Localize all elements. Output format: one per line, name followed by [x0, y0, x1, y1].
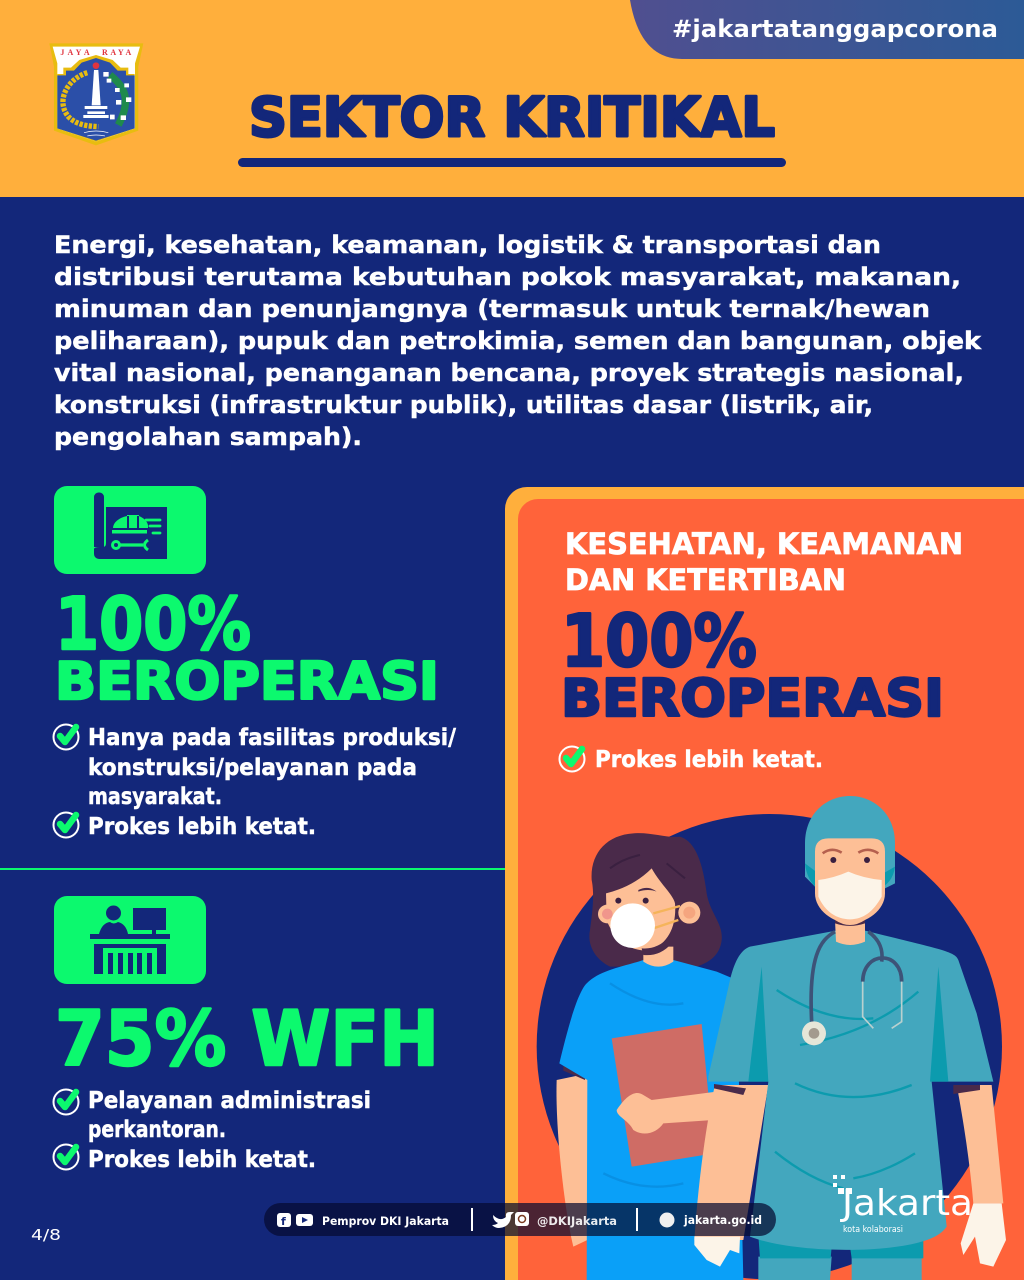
intro text block — [54, 231, 982, 451]
intro text block: pengolahan sampah). — [54, 423, 362, 451]
checklist: perkantoran. — [88, 1117, 226, 1143]
nurse — [556, 833, 763, 1280]
icon: facebook: f — [281, 1215, 286, 1228]
panel backing: yellow edge — [505, 487, 1024, 1280]
panel: production sector — [54, 486, 457, 840]
header band — [0, 0, 1024, 197]
intro text block: distribusi terutama kebutuhan pokok masyarakat, makanan, — [54, 263, 961, 291]
icon: construction blueprint — [54, 486, 206, 574]
separator — [636, 1208, 638, 1231]
intro text block: peliharaan), pupuk dan petrokimia, semen dan bangunan, objek — [54, 327, 982, 355]
separator — [471, 1208, 473, 1231]
panel: health and security — [518, 499, 1024, 1280]
icon: facebook — [277, 1213, 291, 1228]
panel heading: KESEHATAN, KEAMANAN — [565, 527, 963, 561]
checklist: masyarakat. — [88, 784, 222, 810]
stat: 100%: 100% — [561, 599, 757, 683]
navy circle — [537, 814, 1002, 1279]
icon: twitter — [492, 1212, 514, 1228]
hashtag tab: #jakartatanggapcorona — [672, 15, 998, 43]
label: Pemprov DKI Jakarta: Pemprov DKI Jakarta — [322, 1214, 449, 1228]
checklist: Hanya pada fasilitas produksi/ — [88, 725, 457, 751]
logo: Jakarta kota kolaborasi: kota kolaborasi — [843, 1225, 903, 1235]
intro text block: konstruksi (infrastruktur publik), utilitas dasar (listrik, air, — [54, 391, 873, 419]
illustration: medical workers — [537, 796, 1006, 1280]
icon: youtube — [296, 1214, 313, 1226]
icon: Jakarta crest — [49, 43, 143, 145]
panel heading — [565, 527, 963, 597]
intro text block: vital nasional, penanganan bencana, proyek strategis nasional, — [54, 359, 964, 387]
logo: Jakarta kota kolaborasi — [833, 1175, 973, 1235]
divider — [0, 868, 506, 870]
panel heading: DAN KETERTIBAN — [565, 563, 846, 597]
label: @DKIJakarta: @DKIJakarta — [537, 1214, 617, 1228]
checklist: Prokes lebih ketat. — [88, 814, 316, 840]
checklist: Pelayanan administrasi — [88, 1088, 371, 1114]
heading: beroperasi: BEROPERASI — [55, 652, 439, 712]
icon: office desk worker — [54, 896, 206, 984]
logo: Jakarta kota kolaborasi: Jakarta — [840, 1183, 973, 1224]
label: jakarta.go.id: jakarta.go.id — [683, 1213, 762, 1227]
footer social bar — [264, 1203, 776, 1236]
checklist item: Prokes lebih ketat. — [595, 747, 823, 773]
hashtag tab — [630, 0, 1024, 59]
title: SEKTOR KRITIKAL — [249, 86, 775, 149]
title underline — [238, 158, 786, 167]
icon: web globe — [660, 1212, 674, 1228]
intro text block: minuman dan penunjangnya (termasuk untuk ternak/hewan — [54, 295, 930, 323]
checklist — [54, 724, 457, 840]
icon: instagram — [515, 1212, 529, 1226]
icon: Jakarta crest: JAYA — [60, 48, 90, 57]
page number: 4/8 — [31, 1226, 61, 1244]
checklist: Prokes lebih ketat. — [88, 1147, 316, 1173]
panel: office sector — [54, 896, 439, 1173]
checklist: konstruksi/pelayanan pada — [88, 755, 417, 781]
heading: beroperasi: BEROPERASI — [561, 669, 944, 729]
intro text block: Energi, kesehatan, keamanan, logistik & transportasi dan — [54, 231, 881, 259]
doctor — [694, 796, 1006, 1280]
stat: 75% WFH: 75% WFH — [55, 994, 439, 1083]
stat: 100%: 100% — [55, 582, 251, 666]
checklist — [54, 1088, 371, 1173]
icon: Jakarta crest: RAYA — [102, 48, 132, 57]
